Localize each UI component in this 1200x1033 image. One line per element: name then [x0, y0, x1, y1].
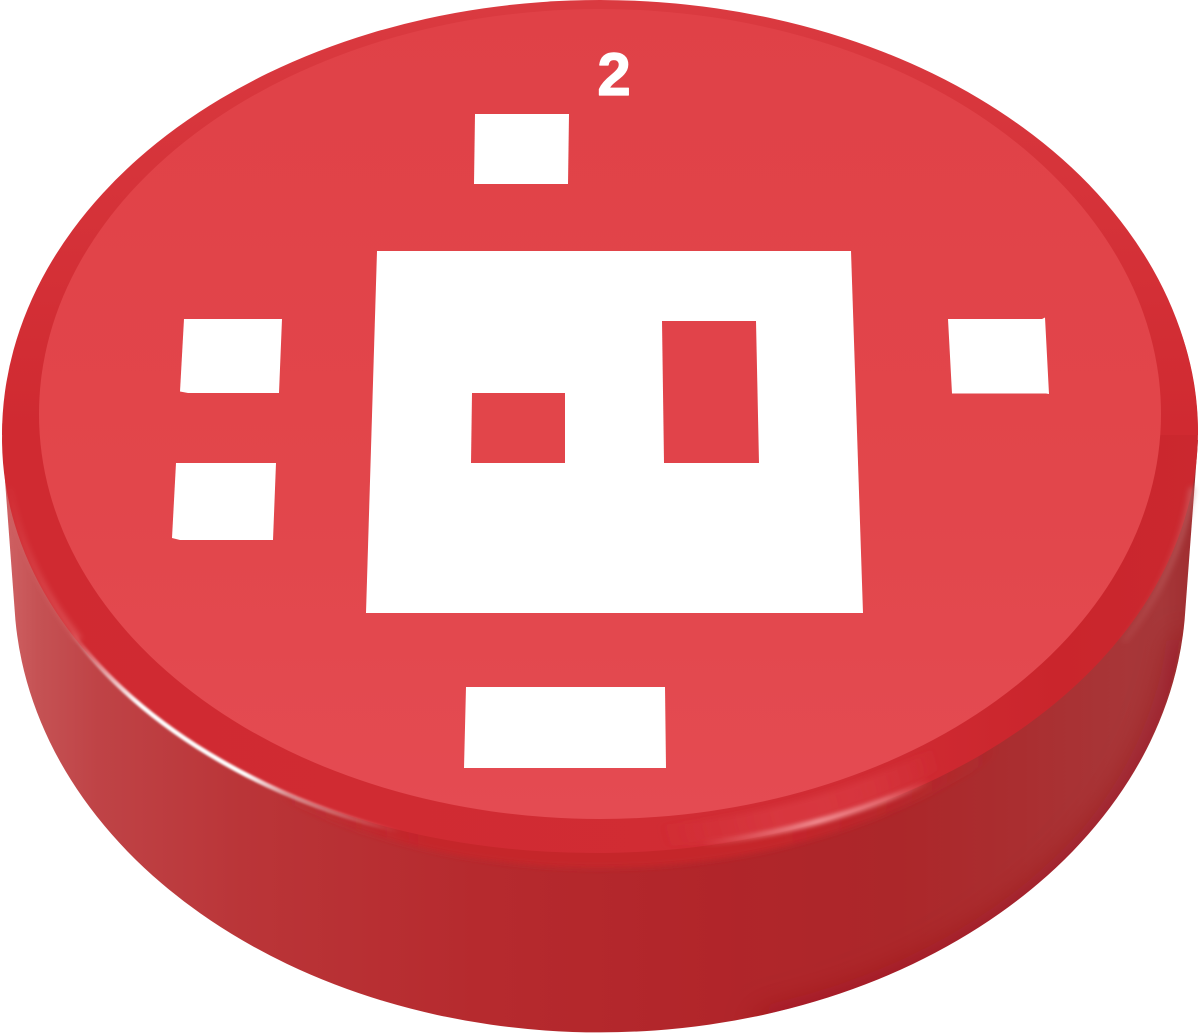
left upper small square	[180, 319, 282, 393]
right small square	[948, 318, 1049, 394]
left lower small square	[172, 463, 276, 540]
superscript number 2: 2	[597, 41, 631, 108]
rim highlights	[10, 490, 1192, 844]
rim lighter zone lower right	[660, 757, 940, 836]
disc top face	[39, 9, 1161, 819]
right window	[662, 321, 759, 463]
central large square with cut-outs	[366, 251, 863, 613]
bottom rectangle	[464, 687, 666, 768]
disc side wall	[2, 440, 1198, 1032]
top small square	[474, 114, 569, 184]
left window	[471, 393, 565, 463]
